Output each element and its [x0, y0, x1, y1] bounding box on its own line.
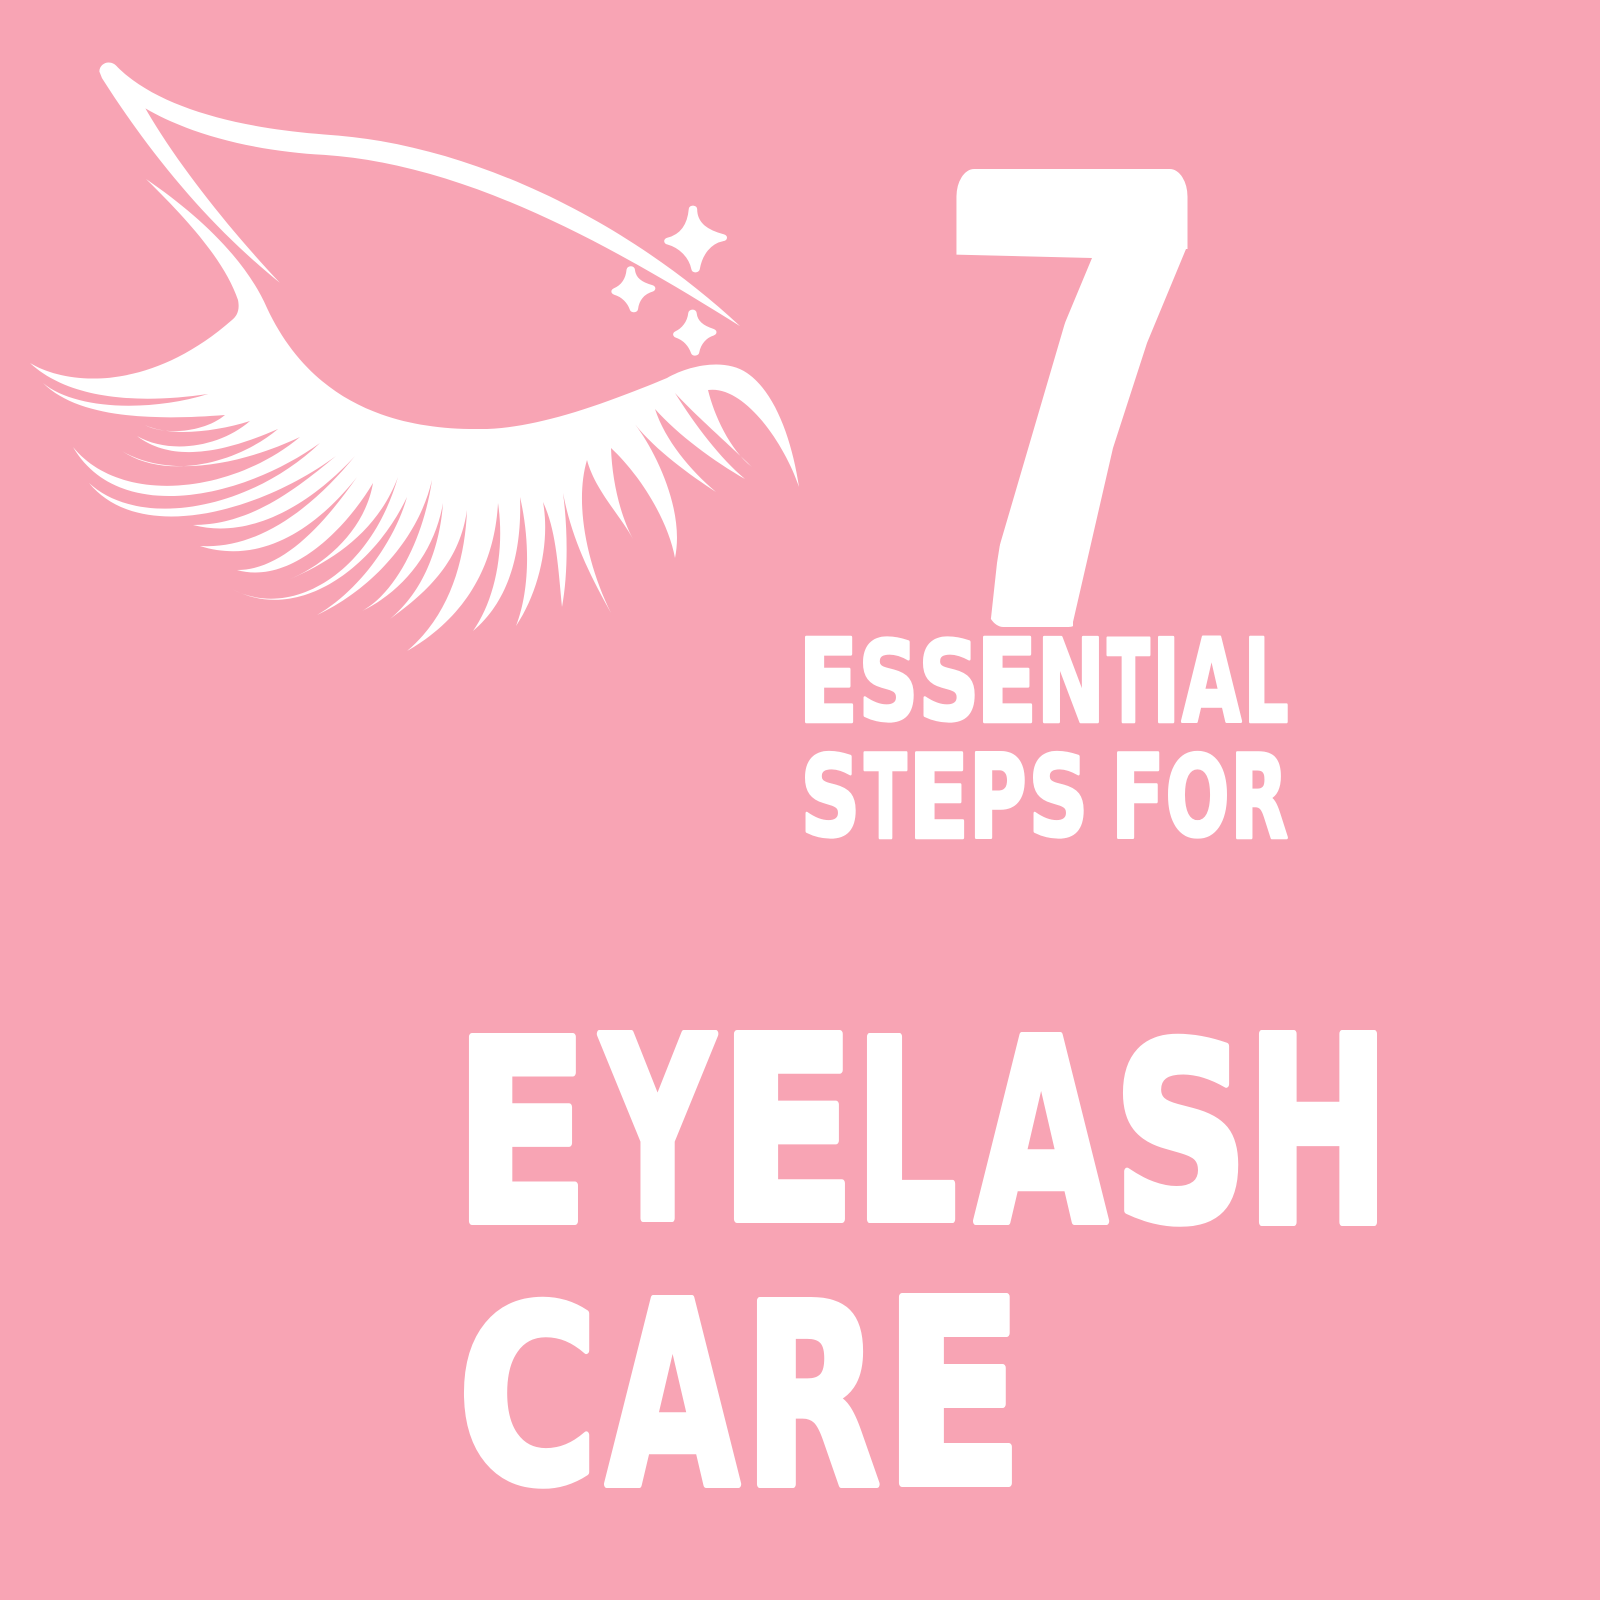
subtitle line: STEPS FOR: R [1230, 731, 1288, 866]
title line: EYELASH: E [454, 987, 590, 1281]
lash line and lashes [30, 179, 799, 651]
title line: CARE: C [457, 1255, 599, 1539]
subtitle line: ESSENTIAL: E [798, 616, 858, 749]
subtitle line: ESSENTIAL: A [1182, 616, 1242, 749]
title line: CARE: R [743, 1252, 881, 1544]
title line: CARE [457, 1246, 1024, 1545]
title line: EYELASH: A [975, 987, 1107, 1282]
subtitle line: ESSENTIAL: I [1152, 615, 1180, 749]
title line: EYELASH: L [855, 987, 957, 1279]
subtitle line: ESSENTIAL: T [1107, 615, 1150, 749]
subtitle line: ESSENTIAL: S [918, 619, 980, 747]
subtitle line: STEPS FOR: T [864, 729, 907, 865]
subtitle line: ESSENTIAL: E [976, 617, 1037, 749]
subtitle line: ESSENTIAL: S [858, 618, 919, 747]
title line: EYELASH: Y [598, 984, 716, 1278]
title line: CARE: E [883, 1246, 1024, 1544]
eyelid crease line [99, 62, 740, 326]
title line: CARE: A [606, 1249, 739, 1545]
subtitle line: STEPS FOR: F [1111, 731, 1165, 865]
title line: EYELASH: S [1112, 992, 1249, 1278]
subtitle line: ESSENTIAL: L [1244, 616, 1289, 749]
title line: EYELASH: E [718, 985, 857, 1280]
title line: EYELASH [454, 982, 1390, 1283]
subtitle line: STEPS FOR: S [1028, 734, 1089, 863]
title line: EYELASH: H [1246, 982, 1390, 1283]
subtitle line: STEPS FOR: E [908, 731, 969, 865]
subtitle line: STEPS FOR: P [969, 731, 1027, 865]
icon: closed eye with lashes [30, 62, 799, 651]
subtitle line: ESSENTIAL [798, 615, 1289, 749]
subtitle line: ESSENTIAL: N [1037, 615, 1105, 749]
subtitle line: STEPS FOR: O [1165, 734, 1230, 863]
icon: sparkles [616, 209, 723, 352]
big number 7: 7 [950, 87, 1198, 730]
subtitle line: STEPS FOR: S [800, 734, 861, 863]
subtitle line: STEPS FOR [800, 729, 1288, 866]
